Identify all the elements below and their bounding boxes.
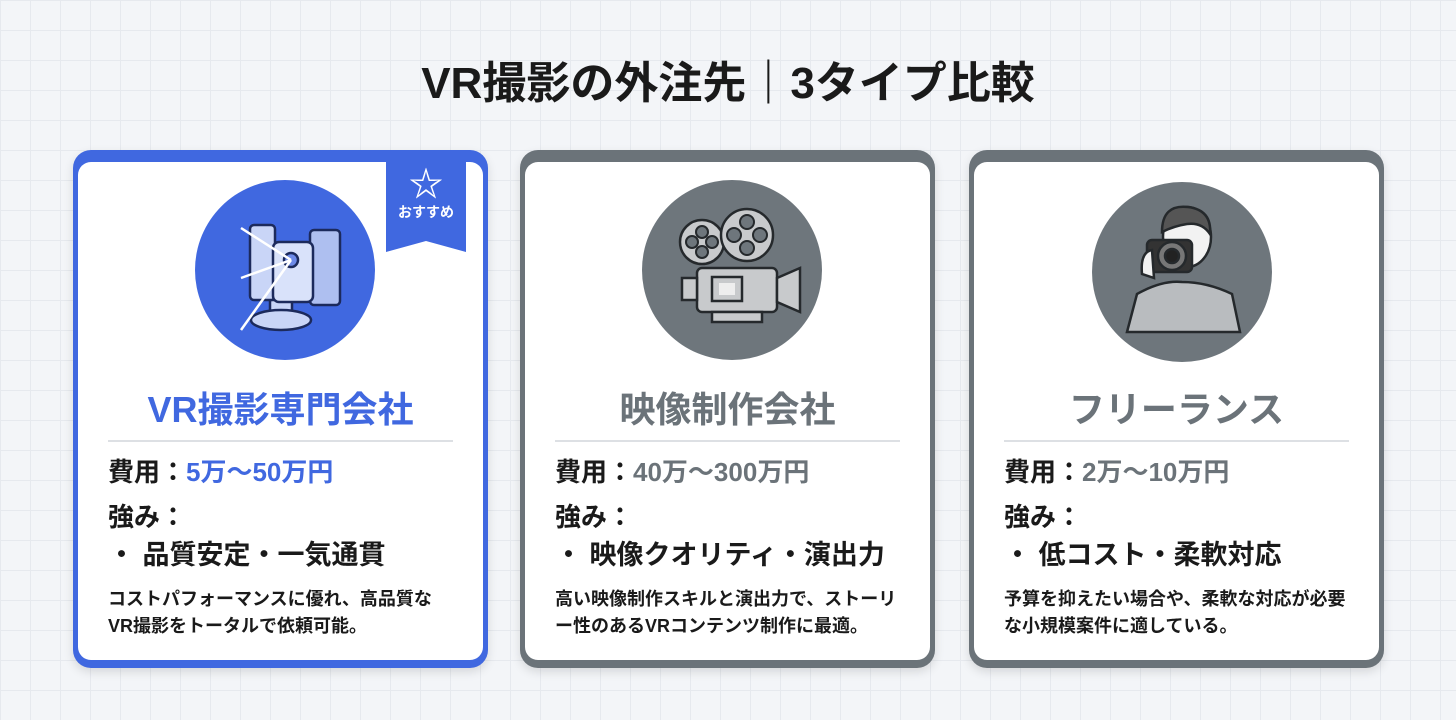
title: VR撮影の外注先｜3タイプ比較 [421,59,1035,108]
heading: VR撮影専門会社 [147,389,414,430]
heading: フリーランス [1069,389,1284,430]
cost: 費用：40万〜300万円 [555,457,809,487]
panel: VR撮影専門会社 [73,150,488,668]
panel: 映像制作会社 [520,150,935,668]
panel: フリーランス [969,150,1384,668]
strengths: 強み： [108,502,186,532]
icon: film camera [642,180,822,360]
icon: 360 camera [195,180,375,360]
cost: 費用：5万〜50万円 [108,457,333,487]
ribbon: おすすめ: おすすめ [398,204,454,220]
description: コストパフォーマンスに優れ、高品質なVR撮影をトータルで依頼可能。 [108,589,432,636]
ribbon: おすすめ: ☆ [409,166,443,204]
description: 高い映像制作スキルと演出力で、ストーリー性のあるVRコンテンツ制作に最適。 [555,589,896,636]
panel: VR撮影専門会社: ・ 品質安定・一気通貫 [108,540,386,570]
heading: 映像制作会社 [619,389,836,430]
cost: 費用：2万〜10万円 [1004,457,1229,487]
description: 予算を抑えたい場合や、柔軟な対応が必要な小規模案件に適している。 [1004,589,1345,636]
icon: photographer [1092,182,1272,362]
panel: フリーランス: ・ 低コスト・柔軟対応 [1004,540,1282,570]
ribbon: おすすめ [386,160,466,252]
strengths: 強み： [1004,502,1082,532]
panel: 映像制作会社: ・ 映像クオリティ・演出力 [555,540,885,570]
strengths: 強み： [555,502,633,532]
